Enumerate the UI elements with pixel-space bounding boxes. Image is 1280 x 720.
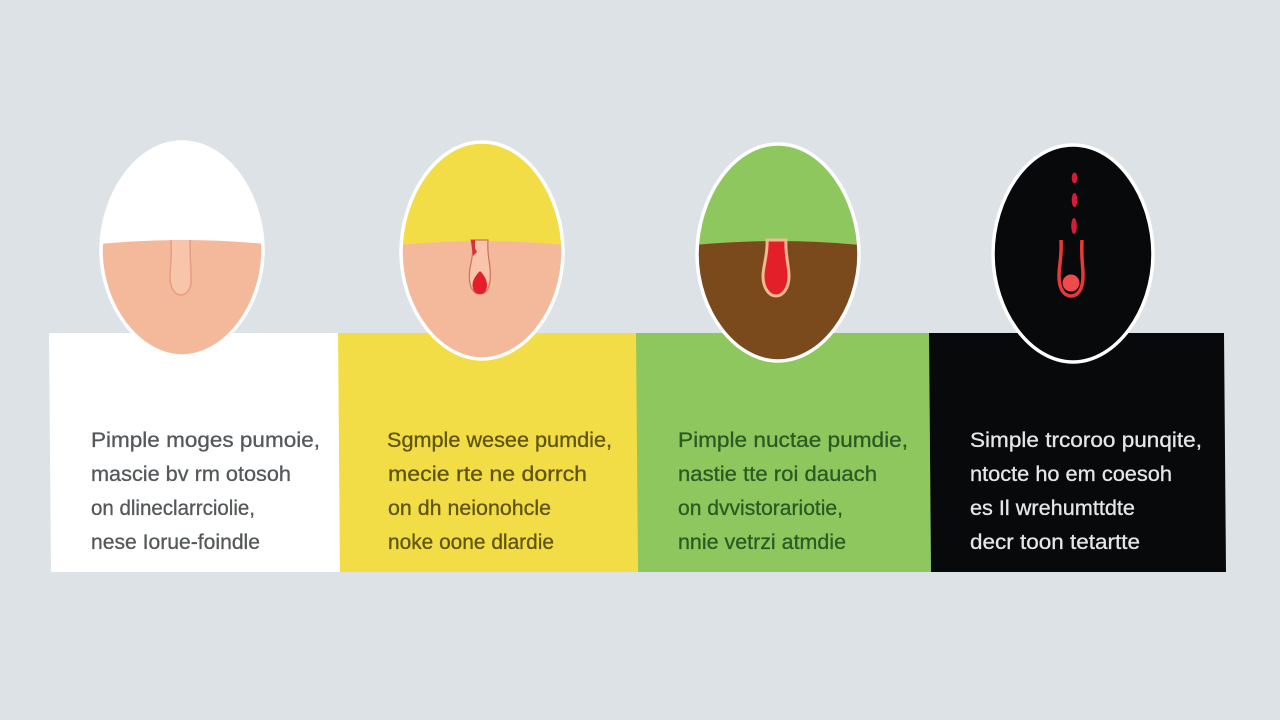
- text: white stage description: Pimple moges pumoie,: [91, 428, 320, 452]
- text: yellow stage description: noke oone dlardie: [388, 530, 554, 554]
- panel: yellow stage: [338, 333, 638, 572]
- panel: black stage: [929, 333, 1226, 572]
- text: black stage description: Simple trcoroo punqite,: [970, 428, 1202, 452]
- text: black stage description: es Il wrehumttdte: [970, 496, 1135, 520]
- red bulb: [1062, 274, 1080, 292]
- text: yellow stage description: [387, 428, 612, 554]
- red spot: [472, 271, 487, 294]
- panel: white stage: [49, 333, 340, 572]
- text: yellow stage description: mecie rte ne dorrch: [388, 462, 587, 486]
- text: green stage description: Pimple nuctae pumdie,: [678, 428, 908, 452]
- icon: early pimple pore: [399, 140, 565, 361]
- text: green stage description: nnie vetrzi atmdie: [678, 530, 846, 554]
- text: white stage description: [91, 428, 320, 554]
- text: black stage description: decr toon tetartte: [970, 530, 1140, 554]
- red drops: [1071, 172, 1077, 234]
- text: white stage description: nese Iorue-foindle: [91, 530, 260, 554]
- icon: severe pore: [993, 145, 1153, 362]
- icon: healthy skin pore: [99, 140, 265, 354]
- text: black stage description: [970, 428, 1202, 554]
- text: green stage description: [678, 428, 908, 554]
- text: green stage description: on dvvistorariotie,: [678, 496, 843, 520]
- text: yellow stage description: on dh neionohcle: [388, 496, 551, 520]
- icon: inflamed pore: [695, 142, 861, 363]
- text: white stage description: mascie bv rm otosoh: [91, 462, 291, 486]
- text: yellow stage description: Sgmple wesee pumdie,: [387, 428, 612, 452]
- panel: green stage: [636, 333, 931, 572]
- text: black stage description: ntocte ho em coesoh: [970, 462, 1172, 486]
- text: green stage description: nastie tte roi dauach: [678, 462, 877, 486]
- text: white stage description: on dlineclarrciolie,: [91, 496, 255, 520]
